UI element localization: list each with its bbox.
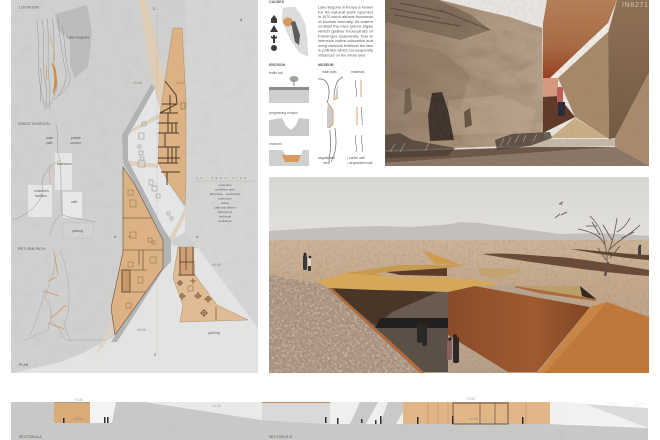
plan labels: ±0.00: [212, 263, 221, 267]
map of lake: [282, 7, 308, 56]
section labels: ±0.00: [212, 404, 221, 408]
visitors: [303, 245, 641, 363]
museum diagrams: MUSEUM: [318, 63, 334, 67]
location labels: LOCATION: [19, 6, 39, 10]
space division diagram: corridor: [70, 141, 82, 145]
legend table: café and offices: [215, 206, 236, 210]
erosion diagrams: museum: [269, 142, 282, 146]
plan labels: ±0.00: [137, 328, 146, 332]
corridor glow: [543, 78, 558, 97]
pit: [328, 288, 448, 372]
text: description: [318, 6, 374, 58]
section drawing: [11, 402, 648, 440]
plan labels: A: [196, 235, 199, 239]
erosion diagrams: [269, 63, 309, 166]
section labels: SECTION B-B: [269, 435, 293, 439]
legend table: no. name area: [196, 176, 246, 180]
rock wall: [385, 0, 544, 150]
text: description: Lake Bogoria in Kenya is known: [318, 6, 373, 10]
text: description: influences on the whole land.: [318, 54, 366, 58]
plan labels: 2: [153, 7, 155, 11]
inner courtyard: [123, 82, 185, 240]
legend table: bathrooms: [218, 210, 233, 214]
rim edge: [328, 288, 425, 373]
lower wall: [615, 71, 650, 166]
text: description: contain the blue-green algae: [318, 25, 373, 29]
panel: site plan: [11, 0, 258, 373]
corridor floor: [543, 96, 575, 133]
panel: causes and erosion diagrams: [269, 0, 374, 166]
icons: causes: [270, 15, 278, 51]
gray walkway: [111, 83, 171, 342]
text: description: Flamingos seasonally. Due to: [318, 34, 373, 38]
orange lower left block: [111, 167, 163, 335]
space division diagram: path: [46, 141, 53, 145]
light ground area: [13, 240, 258, 373]
white room A: [90, 402, 116, 423]
panel: site plan: Lake Bogoria: [67, 36, 90, 40]
orange museum tower: [158, 28, 186, 205]
photo: canyon corridor render: [385, 0, 650, 166]
space division diagram: [13, 122, 96, 238]
right ramp: [550, 402, 567, 424]
text: description: in 1970 which attracts thousands: [318, 15, 373, 19]
sand: [550, 118, 608, 138]
museum diagrams: materials: [351, 70, 365, 74]
erosion diagrams: fertile soil: [269, 71, 283, 75]
section labels: SECTION A-A: [19, 435, 42, 439]
plan labels: ±0.00: [176, 81, 185, 85]
space division diagram: SPACE DIVISION: [18, 122, 50, 126]
ground strip: [385, 147, 650, 166]
plan labels: ±0.00: [133, 81, 142, 85]
erosion diagrams: progressing erosion: [269, 111, 298, 115]
shrubs: [385, 132, 552, 158]
ramp wedge: [145, 402, 262, 420]
orange lower right block: [173, 247, 248, 322]
space division diagram: café: [71, 200, 77, 204]
legend table: exhibition area: [215, 188, 235, 192]
erosion diagrams: EROSION: [269, 63, 286, 67]
figures: [63, 416, 524, 424]
person: [557, 87, 565, 116]
legend table: toilets: [221, 201, 229, 205]
ledge: [530, 139, 615, 147]
museum diagrams: • carten wall: [347, 156, 365, 160]
photo: desert museum render: [269, 177, 649, 373]
sunken small roof: [477, 268, 596, 301]
section labels: +3.00: [466, 397, 475, 401]
return path diagram: RETURN PATH: [18, 247, 46, 251]
plan labels: A: [114, 235, 117, 239]
room B: [262, 403, 330, 424]
far wall: [608, 0, 650, 139]
text: description: is polluted which consequently: [318, 49, 373, 53]
text: description: using chemical fertilizers the lake: [318, 44, 373, 48]
light slit: [550, 23, 608, 78]
axis line: [156, 8, 158, 353]
plan labels: parking: [208, 331, 220, 335]
dead tree: [578, 216, 640, 276]
legend table: [196, 176, 255, 223]
museum diagrams: [318, 63, 373, 165]
legend table: museums: [218, 183, 232, 187]
plan labels: [114, 7, 242, 357]
museum diagrams: main path: [322, 70, 337, 74]
courtyard pavilions: [138, 122, 173, 220]
plan labels: 2: [154, 353, 156, 357]
project code: IN8271: [622, 2, 648, 9]
right wall: [558, 32, 609, 139]
legend table: bookstore: [218, 219, 232, 223]
legend table: bedrooms: [218, 196, 232, 200]
space division diagram: bedrooms: [57, 162, 72, 166]
legend table: technical: [219, 214, 231, 218]
distant trenches: [482, 249, 649, 276]
plan label: PLAN: [19, 363, 29, 367]
desert ground: [269, 240, 649, 373]
rust ramp: [538, 302, 649, 373]
shrub highlights: [390, 134, 537, 152]
birds: [555, 202, 567, 218]
section labels: ±0.00: [74, 417, 83, 421]
yellow roof: [317, 251, 498, 292]
bedrooms grid: [158, 81, 180, 185]
section labels: +3.00: [74, 398, 83, 402]
rust wall: [448, 286, 590, 372]
space division diagram: facilities: [35, 194, 47, 198]
text: description: which gather thousands of: [318, 30, 374, 34]
text: description: intensive coffee cultivation and: [318, 39, 373, 43]
section labels: ±0.00: [469, 417, 478, 421]
heading: causes: CAUSES: [269, 0, 285, 4]
tan galleries: [403, 402, 550, 424]
space division diagram: parking: [72, 229, 83, 233]
museum diagrams: degradated: [318, 156, 335, 160]
legend table: laboratory · workshops: [210, 192, 241, 196]
location diagram: [19, 5, 92, 110]
section labels: [19, 397, 478, 439]
mountains: [269, 222, 649, 241]
rock strata: [385, 0, 507, 135]
text: description: of tourists annually. Its waters: [318, 20, 373, 24]
rock cave shadow: [404, 88, 472, 141]
museum diagrams: • degradated wall: [347, 161, 373, 165]
sky: [269, 177, 649, 241]
space division diagram: museum's: [34, 189, 49, 193]
space division diagram: main: [46, 136, 53, 140]
diagonal crossing strips: [130, 113, 160, 134]
space division diagram: private: [71, 136, 81, 140]
ground: [11, 402, 648, 440]
museum diagrams: area: [323, 161, 330, 165]
upper path strip: [139, 0, 165, 110]
tan room A: [54, 402, 90, 423]
text: description: for its natural park opened: [318, 10, 373, 14]
white stripes: [330, 402, 403, 424]
return path diagram: [18, 247, 105, 342]
plan labels: 4: [240, 18, 242, 22]
orange ceiling: [543, 0, 617, 78]
